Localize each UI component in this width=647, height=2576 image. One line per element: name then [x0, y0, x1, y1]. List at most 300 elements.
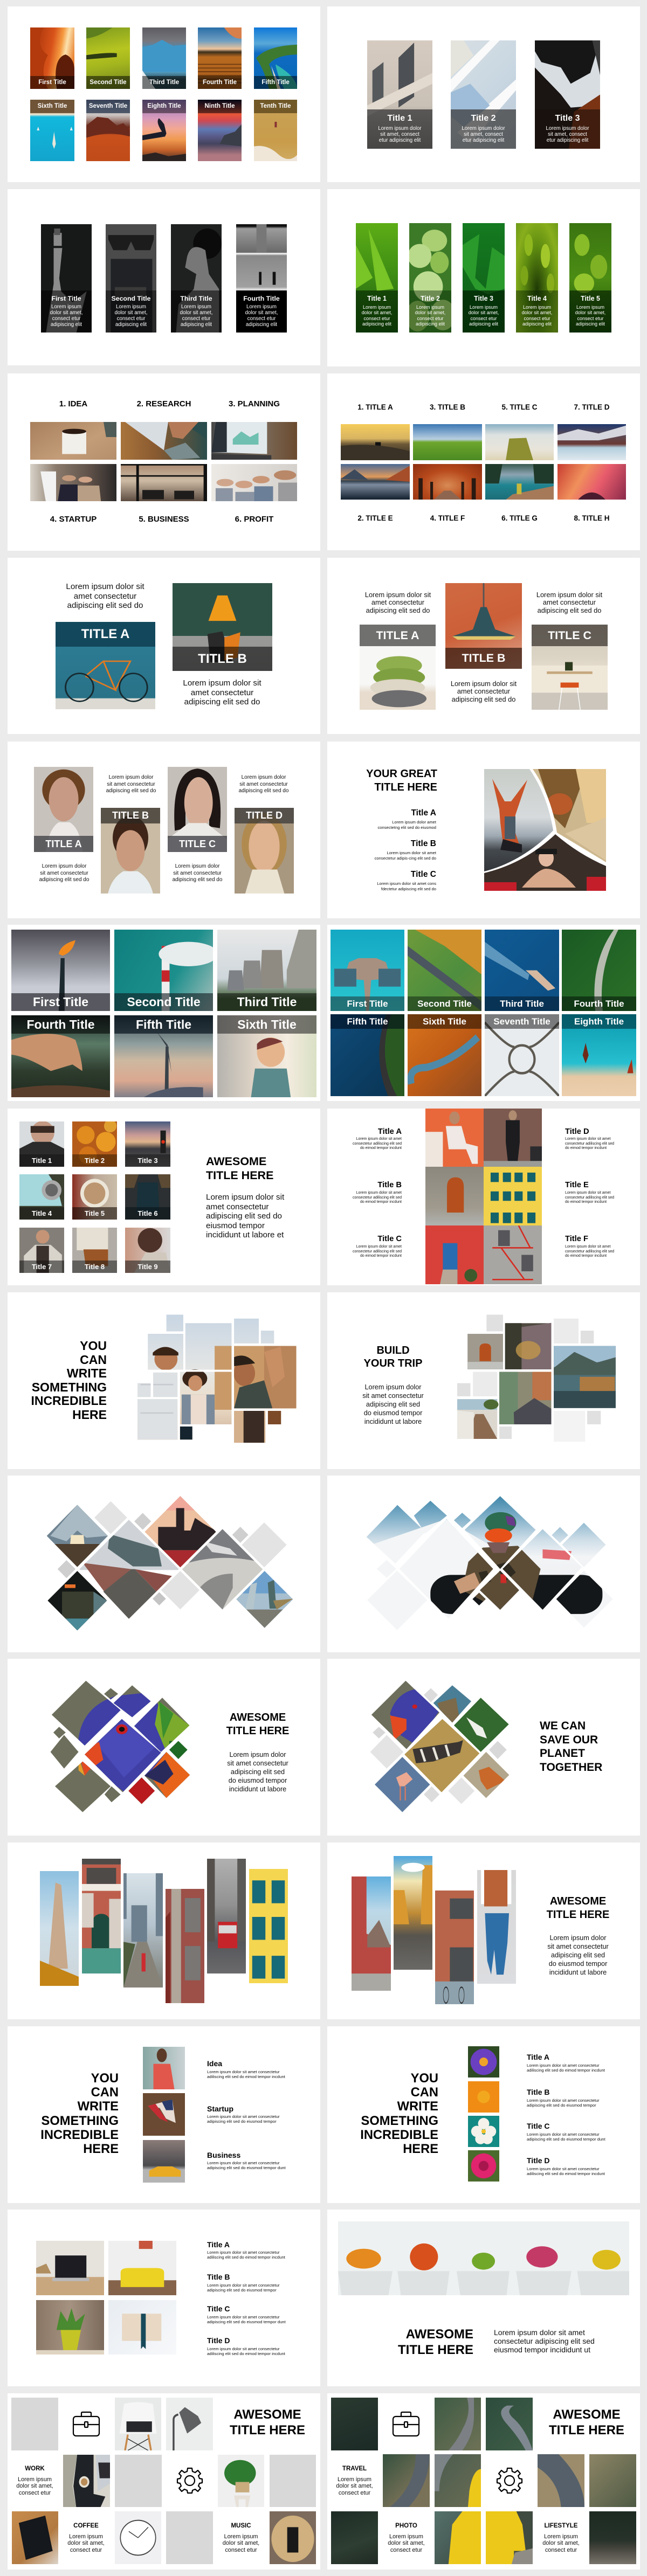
body text: Lorem ipsum dolor sit — [206, 1193, 284, 1202]
photo: coffee on lap — [63, 2455, 110, 2507]
caption — [217, 1015, 316, 1034]
caption band: TITLE B — [198, 652, 247, 666]
panel: cactus row — [327, 2210, 640, 2386]
item text D: Lorem ipsum dolor sit amet consectetur — [527, 2166, 600, 2171]
photo: green pillows, TITLE A — [360, 625, 436, 710]
caption — [114, 1015, 213, 1034]
caption: sit amet, consect — [548, 131, 587, 137]
caption: Fourth Title — [203, 79, 237, 86]
item heading: Idea: Idea — [207, 2059, 222, 2068]
caption: Seventh Title — [493, 1016, 550, 1027]
title — [204, 1711, 312, 1737]
label: 8. TITLE H: 8. TITLE H — [574, 514, 609, 522]
photo: canyon, First Title — [30, 27, 74, 89]
item text A: Lorem ipsum dolor sit amet consectetur — [527, 2063, 600, 2068]
title: AWESOME — [233, 2407, 301, 2422]
photo: woman in red — [143, 2047, 185, 2089]
photo: white plumeria — [468, 2116, 499, 2147]
caption: Fifth Title — [136, 1017, 191, 1031]
caption: dolor sit amet, — [469, 310, 499, 315]
photo: fire escape — [484, 1225, 542, 1284]
title — [540, 1719, 602, 1774]
caption: Title 6 — [137, 1209, 158, 1217]
caption: Title 2 — [471, 114, 495, 123]
title: YOUR GREAT — [366, 768, 437, 780]
body text: incididunt ut labore et — [206, 1230, 284, 1239]
text block: lorem above B: adipiscing elit sed do — [106, 788, 156, 794]
item text B — [328, 850, 436, 861]
item text C — [321, 1245, 402, 1259]
photo: city towers and tram — [123, 1873, 163, 1988]
text: PHOTO: PHOTO Lorem ipsum — [389, 2523, 423, 2539]
text block: lorem above C: adipiscing elit sed do — [538, 606, 601, 614]
photo: american flag — [143, 2093, 185, 2136]
text block: lorem below B: adipiscing elit sed do — [452, 695, 515, 703]
caption — [142, 76, 186, 89]
item text A: adiliscing elit sed do eimod tempor incdunt — [207, 2255, 285, 2260]
item text: Idea — [207, 2070, 285, 2079]
text: PHOTO: consect etur — [390, 2547, 422, 2553]
caption — [125, 1154, 170, 1167]
photo: black book on wood — [12, 2511, 58, 2564]
caption band — [235, 808, 294, 823]
caption — [485, 996, 559, 1011]
photo: snowy roundabout, Seventh Title — [485, 1014, 559, 1096]
item heading: Title B: Title B — [527, 2088, 550, 2096]
text block: lorem under A: Lorem ipsum dolor — [42, 863, 86, 869]
caption: Sixth Title — [38, 103, 67, 109]
item text C: Lorem ipsum dolor sit amet cons — [377, 881, 436, 886]
text block: lorem above A — [356, 591, 440, 614]
item heading: Title A: Title A — [207, 2240, 230, 2249]
text: TRAVEL: TRAVEL Lorem ipsum — [338, 2466, 371, 2482]
item heading: Title F: Title F — [565, 1235, 588, 1243]
body text: adipiscing elit sed — [366, 1401, 420, 1408]
text: WORK: WORK Lorem ipsum — [18, 2466, 52, 2482]
title: WE CAN — [540, 1720, 586, 1732]
panel: four strips with title — [327, 1843, 640, 2019]
item text F: Lorem ipsum dolor sit amet — [565, 1245, 610, 1249]
text: COFFEE: dolor sit amet, — [67, 2540, 105, 2546]
text: TRAVEL: dolor sit amet, — [336, 2483, 373, 2489]
title: HERE — [83, 2142, 119, 2156]
item text A: do eimod tempor incdunt — [360, 1146, 402, 1150]
photo: woman with glasses, TITLE B — [101, 808, 160, 894]
photo: orange forest curve, Sixth Title — [408, 1014, 481, 1096]
item text E: consectetur adiliscing elit sed — [565, 1196, 614, 1200]
item text C — [207, 2315, 286, 2324]
photo: bay, Fifth Title — [254, 27, 297, 89]
caption: Title 4 — [527, 295, 547, 302]
panel: build your trip mosaic — [327, 1292, 640, 1469]
photo: sunrise hiker — [341, 424, 410, 460]
caption band: TITLE A — [81, 627, 129, 641]
panel: six photos with title bands — [8, 925, 320, 1101]
title — [533, 2407, 641, 2438]
panel: three architecture columns — [327, 6, 640, 182]
photo: woman on orange steps — [425, 1109, 484, 1167]
body text: adipiscing elit sed — [551, 1951, 605, 1959]
caption: Fifth Title — [347, 1016, 388, 1027]
item text A: Lorem ipsum dolor sit amet consectetur — [207, 2250, 280, 2255]
caption: etur adipiscing elit — [547, 137, 588, 143]
text: COFFEE — [62, 2523, 110, 2553]
caption — [142, 100, 186, 113]
label: 6. PROFIT: 6. PROFIT — [235, 515, 273, 524]
label: 4. TITLE F: 4. TITLE F — [430, 514, 465, 522]
label: 1. TITLE A: 1. TITLE A — [357, 403, 393, 411]
photo: man by brick wall — [484, 1109, 542, 1167]
thumb: railway dusk, Title 3 — [125, 1121, 170, 1167]
caption band — [532, 625, 608, 646]
collage: diamond architecture — [32, 1477, 302, 1649]
caption band — [168, 836, 227, 852]
caption — [86, 100, 130, 113]
text block: lorem under A: adipiscing elit sed do — [39, 877, 89, 883]
text: TRAVEL — [331, 2466, 378, 2496]
item text F: do eimod tempor incdunt — [565, 1254, 607, 1258]
text: COFFEE: consect etur — [70, 2547, 102, 2553]
caption band — [360, 625, 436, 646]
photo: coffee mug — [30, 422, 116, 460]
caption — [254, 76, 297, 89]
caption — [356, 290, 398, 333]
text: PHOTO: dolor sit amet, — [388, 2540, 425, 2546]
photo: backpacker from behind — [477, 1870, 516, 1984]
item text E — [565, 1191, 614, 1205]
collage: parrot through diamonds — [8, 1659, 320, 1836]
label: 7. TITLE D: 7. TITLE D — [574, 403, 609, 411]
caption — [485, 1014, 559, 1029]
caption — [198, 76, 242, 89]
item text C: adipiscing elit sed do eiusmod tempor dunt — [207, 2319, 286, 2324]
item text D — [565, 1137, 614, 1151]
photo: orange lamp and sofa, TITLE B — [173, 583, 272, 671]
text: MUSIC: consect etur — [225, 2547, 257, 2553]
caption — [19, 1154, 64, 1167]
photo: aerial dock, First Title — [331, 930, 404, 1011]
caption: Fifth Title — [261, 79, 290, 86]
caption: dolor sit amet, — [415, 310, 445, 315]
text block: lorem below B: Lorem ipsum dolor sit — [451, 680, 517, 688]
photo: valley with yellow hood — [435, 2454, 481, 2507]
label: 2. RESEARCH: 2. RESEARCH — [137, 399, 191, 408]
caption: consect etur — [117, 316, 145, 322]
photo: laughing boy, Sixth Title — [217, 1015, 316, 1097]
photo: cooling towers, Third Title — [217, 930, 316, 1011]
caption: consect etur — [417, 316, 444, 321]
text block: lorem above C: amet consectetur — [543, 598, 596, 606]
caption — [30, 76, 74, 89]
photo: wall clock — [115, 2511, 161, 2564]
label: 1. IDEA: 1. IDEA — [59, 399, 87, 408]
item text D: Lorem ipsum dolor sit amet consectetur — [207, 2346, 280, 2351]
caption: Third Title — [149, 79, 179, 86]
photo: red wall with blue door — [425, 1225, 484, 1284]
caption — [72, 1207, 117, 1220]
grey tile — [166, 2511, 213, 2564]
panel: bicycle and lamp two titles — [8, 558, 320, 734]
photo: chair with clothes — [115, 2398, 161, 2450]
item text B: do eimod tempor incdunt — [360, 1200, 402, 1204]
title: PLANET — [540, 1747, 585, 1760]
title: TITLE HERE — [206, 1169, 273, 1182]
photo: brick building with pipe — [166, 1889, 204, 2003]
item text B: consectetur adiliscing elit sed — [353, 1196, 402, 1200]
text block: lorem under C: Lorem ipsum dolor — [175, 863, 219, 869]
item heading: Title C: Title C — [411, 870, 436, 879]
thumb: classic car, Title 4 — [19, 1174, 64, 1220]
photo: smoking chimney, Second Title — [114, 930, 213, 1011]
photo: conifer, Title 5 — [569, 223, 611, 333]
item text B: adipiscing elit sed do eiusmod tempor — [527, 2103, 596, 2108]
caption: Title 5 — [85, 1209, 105, 1217]
label: 5. BUSINESS: 5. BUSINESS — [139, 515, 189, 524]
item heading: Title B: Title B — [207, 2273, 230, 2281]
title: INCREDIBLE — [40, 2128, 119, 2142]
item text: Startup — [207, 2115, 280, 2124]
item text A — [207, 2250, 285, 2260]
caption — [125, 1207, 170, 1220]
photo: gas flare, First Title — [11, 930, 110, 1011]
body text: adipiscing elit sed — [231, 1768, 285, 1776]
caption: Title 4 — [32, 1209, 52, 1217]
item heading: Title A: Title A — [527, 2053, 549, 2061]
item text D: adiliscing elit sed do eimod tempor incdunt — [527, 2171, 605, 2176]
text: LIFESTYLE: consect etur — [545, 2547, 577, 2553]
collage: snowboarder seen through diamonds — [327, 1476, 640, 1652]
title: TITLE HERE — [398, 2343, 473, 2357]
panel: parrot diamonds with text — [8, 1659, 320, 1836]
photo: dark forest lower — [331, 2511, 378, 2564]
text block: lorem below B: Lorem ipsum dolor sit — [183, 678, 261, 688]
collage: friends seen through rectangles — [137, 1315, 297, 1443]
photo: beige building, Title 1 — [367, 40, 432, 149]
icon: gear — [496, 2467, 523, 2494]
body text: incididunt ut labore — [229, 1785, 286, 1793]
photo: purple flower — [468, 2046, 499, 2078]
caption: dolor sit amet, — [115, 310, 147, 316]
text block: lorem above D: sit amet consectetur — [239, 781, 288, 787]
photo: glasses and notebook, Second Title — [106, 224, 156, 333]
caption: consect etur — [524, 316, 550, 321]
title: TITLE HERE — [374, 781, 437, 793]
panel: interior three titles — [327, 558, 640, 734]
caption: Title 3 — [555, 114, 580, 123]
body text: sit amet consectetur — [362, 1392, 424, 1400]
collage: village photos with grey tiles — [327, 1292, 640, 1469]
text: MUSIC: dolor sit amet, — [223, 2540, 259, 2546]
caption: adipiscing elit — [181, 322, 212, 328]
caption: adipiscing elit — [469, 321, 498, 327]
grey tile — [115, 2455, 162, 2507]
text block: lorem above B: Lorem ipsum dolor — [109, 774, 153, 780]
item text: Business: adipiscing elit sed do eiusmod tempor dunt — [207, 2165, 286, 2170]
caption: Title 1 — [32, 1157, 52, 1165]
item text A: Lorem ipsum dolor sit amet — [356, 1137, 402, 1141]
item text C: Lorem ipsum dolor sit amet consectetur — [207, 2315, 280, 2319]
caption — [11, 1015, 110, 1034]
body text: sit amet consectetur — [227, 1760, 288, 1767]
thumb: woman in leather, Title 1 — [19, 1121, 64, 1167]
caption: dolor sit amet, — [575, 310, 605, 315]
caption: etur adipiscing elit — [379, 137, 421, 143]
item text C: Lorem ipsum dolor sit amet consectetur — [527, 2132, 600, 2137]
title: CAN — [411, 2086, 438, 2100]
photo: hand planting seed, Fourth Title — [11, 1015, 110, 1097]
body text: eiusmod tempor — [206, 1221, 265, 1230]
item text A — [527, 2063, 605, 2073]
title: TITLE HERE — [230, 2423, 305, 2437]
thumb: backpack flat lay, Title 6 — [125, 1174, 170, 1220]
item text: Idea: Lorem ipsum dolor sit amet consectetur — [207, 2069, 280, 2074]
caption — [106, 290, 156, 333]
caption: dolor sit amet, — [362, 310, 392, 315]
body text — [206, 1193, 284, 1239]
title: AWESOME — [230, 1712, 286, 1723]
title: INCREDIBLE — [360, 2128, 438, 2142]
body text — [524, 1934, 632, 1977]
item text: Startup: Lorem ipsum dolor sit amet consectetur — [207, 2114, 280, 2119]
caption: consect etur — [182, 316, 210, 322]
text: LIFESTYLE — [538, 2523, 584, 2553]
caption: adipiscing elit — [522, 321, 552, 327]
photo: hanging lamp, TITLE B — [445, 583, 522, 669]
photo: wind turbine, Fifth Title — [114, 1015, 213, 1097]
item heading: Title D: Title D — [527, 2156, 550, 2165]
title: TITLE HERE — [547, 1909, 609, 1921]
panel: five green leaf columns — [327, 189, 640, 366]
item heading: Title A: Title A — [378, 1127, 402, 1136]
thumb: leather bag, Title 8 — [72, 1228, 117, 1273]
label: 2. TITLE E: 2. TITLE E — [357, 514, 393, 522]
body text: Lorem ipsum dolor — [364, 1383, 422, 1391]
grey tile — [11, 2398, 58, 2450]
photo: teal lake — [485, 464, 554, 500]
caption: dolor sit amet, — [245, 310, 278, 316]
item text E: do eimod tempor incdunt — [565, 1200, 607, 1204]
caption — [463, 290, 505, 333]
caption: adipiscing elit — [576, 321, 605, 327]
text block: lorem below B — [442, 680, 526, 703]
photo: grey station, Fourth Title — [236, 224, 287, 333]
title: AWESOME — [550, 1895, 606, 1907]
photo: pink canyon — [557, 464, 626, 500]
caption — [171, 290, 222, 333]
collage: wildlife diamonds — [327, 1659, 640, 1836]
collage: three curved travel photos — [484, 769, 606, 891]
body text — [204, 1750, 312, 1793]
text: MUSIC: MUSIC Lorem ipsum — [224, 2523, 258, 2539]
caption: Title 3 — [137, 1157, 158, 1165]
text block: lorem above A — [66, 582, 144, 610]
photo: white stairs, Title 2 — [451, 40, 516, 149]
photo: red venetian house — [82, 1859, 121, 1973]
body text: incididunt ut labore — [364, 1418, 422, 1425]
title — [214, 2407, 321, 2438]
caption: Title 8 — [85, 1263, 105, 1271]
title: HERE — [72, 1408, 107, 1422]
item heading: Title B: Title B — [377, 1181, 402, 1189]
caption — [408, 1014, 481, 1029]
title: SOMETHING — [361, 2114, 438, 2128]
panel: tile mosaic with friends — [8, 1292, 320, 1469]
caption — [198, 100, 242, 113]
caption: Lorem ipsum — [523, 304, 551, 310]
photo: laptop on desk — [36, 2241, 104, 2295]
caption: adipiscing elit — [416, 321, 445, 327]
photo: spiral green, Title 4 — [516, 223, 558, 333]
title: WRITE — [397, 2100, 438, 2114]
caption: Lorem ipsum — [470, 304, 498, 310]
item heading: Title B: Title B — [411, 839, 436, 848]
caption: Title 7 — [32, 1263, 52, 1271]
photo: yellow facade — [484, 1167, 542, 1225]
title: WRITE — [78, 2100, 119, 2114]
item text: Business: Lorem ipsum dolor sit amet consectetur — [207, 2160, 280, 2165]
panel: four flowers list — [327, 2026, 640, 2203]
photo: dark hair woman, TITLE C — [168, 767, 227, 852]
panel: six item street photos — [327, 1109, 640, 1285]
photo: yellow house shutters — [249, 1869, 288, 1983]
caption band — [445, 648, 522, 669]
photo: skyscrapers from below, Title 3 — [535, 40, 600, 149]
photo: woman profile, Third Title — [171, 224, 222, 333]
photo: yellow sofa — [108, 2241, 176, 2295]
caption: Second Title — [90, 79, 127, 86]
item heading: Startup: Startup — [207, 2104, 233, 2113]
caption: consect etur — [52, 316, 80, 322]
text block: lorem below B: adipiscing elit sed do — [184, 697, 260, 707]
panel: four home photos list — [8, 2210, 320, 2386]
photo: yellow taxi — [143, 2140, 185, 2183]
caption: Seventh Title — [89, 103, 127, 109]
photo: five potted cacti — [338, 2221, 629, 2295]
panel: snowboarder diamonds — [327, 1476, 640, 1652]
item text B — [321, 1191, 402, 1205]
title: TOGETHER — [540, 1761, 602, 1773]
photo: ship in deep blue, Third Title — [485, 930, 559, 1011]
photo: statue of liberty, First Title — [41, 224, 92, 333]
caption: Fourth Title — [243, 295, 280, 302]
caption: adipiscing elit — [246, 322, 277, 328]
item text D: do eimod tempor incdunt — [565, 1146, 607, 1150]
photo: dark rocks — [589, 2511, 636, 2564]
body text: do eiusmod tempor — [549, 1960, 607, 1968]
caption: First Title — [347, 999, 388, 1009]
photo: phone on tree stump — [270, 2511, 316, 2564]
caption: Lorem ipsum — [416, 304, 444, 310]
caption — [86, 76, 130, 89]
item text B: adipiscing elit sed do eiusmod tempor — [207, 2288, 277, 2293]
caption: dolor sit amet, — [50, 310, 82, 316]
photo: fern, Title 1 — [356, 223, 398, 333]
item text B: Lorem ipsum dolor sit amet — [387, 850, 436, 855]
photo: flatiron building — [40, 1871, 79, 1986]
photo: bicycle, TITLE A — [56, 622, 155, 709]
title: YOU — [80, 1339, 107, 1353]
text: LIFESTYLE: LIFESTYLE Lorem ipsum — [544, 2523, 578, 2539]
caption — [451, 109, 516, 149]
item text A: consectetng elit sed do eiusmod — [377, 825, 436, 830]
item heading: Title C: Title C — [377, 1235, 402, 1243]
caption: consect etur — [470, 316, 497, 321]
title: YOUR TRIP — [364, 1358, 422, 1369]
text: WORK: consect etur — [19, 2490, 51, 2496]
item text C: adipiscing elit sed do eiusmod tempor dunt — [527, 2137, 605, 2142]
caption: Third Title — [237, 995, 297, 1009]
photo: red alley — [352, 1876, 391, 1991]
